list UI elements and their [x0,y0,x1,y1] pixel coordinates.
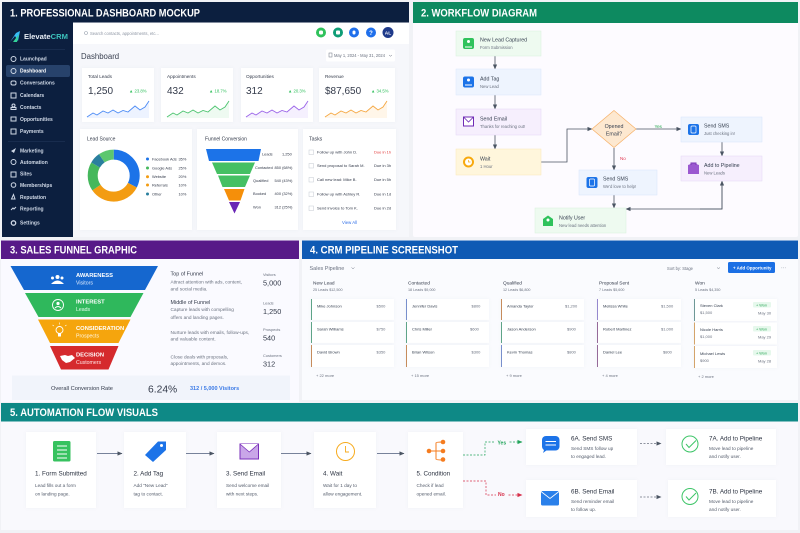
node: add tag: Add Tag [480,76,499,82]
column: proposal sent [597,280,681,378]
KPI card: opportunities: ▲ 20.3% [288,88,306,94]
KPI card: total leads [82,68,154,122]
panel: dashboard mockup [2,2,409,237]
date range: May 1, 2024 - May 31, 2024 [334,53,386,58]
overall conversion rate: Overall Conversion Rate [51,386,113,392]
column: new lead: + 22 more [316,373,335,378]
column: won: 5 Leads $4,350 [695,288,720,292]
tasks card: Send proposal to Sarah M. [317,163,365,168]
KPI card: revenue [319,68,395,122]
column: won: $1,500 [700,310,713,315]
chart card: funnel conversion: 540 (43%) [274,178,293,183]
funnel tier: consideration: Prospects [76,334,99,340]
column: contacted: Contacted [408,280,430,286]
node: send email [456,109,541,135]
column: contacted: + 15 more [411,373,430,378]
chart card: lead source donut: 20% [178,174,187,179]
step: send email: with next steps. [226,492,258,496]
KPI card: appointments [161,68,233,122]
label: no: No [620,156,626,161]
step: wait [314,432,376,508]
tasks card: Follow up with Ashley R. [317,192,360,196]
KPI card: opportunities [241,68,313,122]
chart card: funnel conversion: Qualified [253,178,268,183]
chart card: lead source donut: 10% [178,182,187,188]
funnel tier: interest: Leads [76,307,91,313]
column: contacted: Jennifer Davis [412,304,437,308]
funnel descriptions: Capture leads with compelling [170,307,234,313]
funnel tier: interest: INTEREST [76,300,105,306]
KPI card: total leads: ▲ 23.8% [129,88,147,94]
step: add tag: Add "New Lead" [134,483,168,488]
chart card: funnel conversion: 1,250 [282,152,293,156]
sidebar navigation: Sites [20,172,32,178]
chart card: lead source donut: Lead Source [87,136,116,142]
step: add tag [124,432,186,508]
funnel metrics [263,272,282,368]
step: form submitted: on landing page. [35,492,70,496]
step: 7b add to pipeline: Move lead to pipeline [709,499,754,504]
node: send email: Thanks for reaching out! [480,124,525,129]
chart card: funnel conversion: 850 (68%) [274,165,293,170]
column: contacted: Brian Wilson [412,350,434,354]
node: wait [456,149,541,175]
chart card: funnel conversion: Contacted [255,165,273,170]
column: qualified: + 9 more [506,373,523,378]
column: won: + Won [756,328,767,332]
KPI card: appointments: 432 [167,86,184,97]
heading: workflow: 2. WORKFLOW DIAGRAM [421,8,537,20]
funnel tier: consideration [38,320,130,343]
step: 7a add to pipeline [666,429,776,465]
tasks card: Follow up with John D. [317,150,357,154]
column: contacted: $600 [470,326,480,332]
tasks card: View All [342,220,357,225]
step: 7b add to pipeline [668,480,776,517]
funnel metrics: 5,000 [263,278,281,288]
column: won: Nicole Harris [700,327,723,332]
column: won: + 2 more [698,374,715,379]
top search bar: ? [369,31,373,37]
step: send email [217,432,281,508]
KPI card: appointments: Appointments [167,74,196,79]
chart card: lead source donut: Other [152,192,162,196]
column: won: May 29 [758,334,772,340]
KPI card: total leads: 1,250 [88,86,113,97]
branch: no: No [498,492,505,498]
KPI card: revenue: Revenue [325,74,344,79]
overall conversion rate: 6.24% [148,384,177,396]
step: 6b send email: Send reminder email [571,499,614,504]
heading: automation: 5. AUTOMATION FLOW VISUALS [10,407,158,419]
node: new lead captured: Form Submission [480,45,513,50]
funnel descriptions: Close deals with proposals, [170,354,228,360]
chart card: lead source donut: Referrals [152,182,168,188]
column: proposal sent: Melissa White [603,304,629,308]
flow arrows [97,452,404,454]
sidebar navigation: Reputation [20,195,46,201]
sidebar navigation: Launchpad [20,56,47,62]
heading: funnel [1,240,299,259]
chart card: lead source donut: 25% [178,166,187,170]
overall conversion rate [12,376,290,400]
sidebar navigation: Calendars [20,93,44,99]
column: contacted [406,280,489,378]
column: contacted: $300 [472,350,481,354]
column: won: $1,000 [700,334,713,339]
step: 7a add to pipeline: 7A. Add to Pipeline [709,436,763,442]
pipeline toolbar: Sort by: Stage [667,266,694,271]
node: notify user: Notify User [559,216,585,222]
tasks card [303,129,396,230]
overall conversion rate: 312 / 5,000 Visitors [190,386,239,392]
funnel descriptions [170,272,249,367]
column: qualified: $800 [567,350,577,354]
column: proposal sent: Robert Martinez [603,326,631,332]
step: wait: 4. Wait [323,470,343,478]
column: contacted: Chris Miller [412,326,433,332]
column: won: $900 [700,358,710,363]
step: form submitted: 1. Form Submitted [35,470,87,478]
top search bar [73,23,409,44]
step: 6a send sms: to engaged lead. [571,454,606,459]
node: send sms lower [579,170,657,195]
column: proposal sent: $800 [663,350,673,354]
step: 6a send sms [526,429,637,465]
node: add to pipeline: New Leads [704,170,725,176]
chart card: funnel conversion: 312 (25%) [274,204,293,210]
tasks card: Due in 1h [374,150,391,154]
sidebar navigation: Memberships [20,183,52,189]
branch: yes [463,439,522,455]
column: new lead: $350 [376,350,386,354]
label: yes: Yes [654,124,663,129]
sidebar navigation [2,22,73,237]
column: new lead: 25 Leads $12,500 [313,288,343,292]
step: send email: Send welcome email [226,483,269,488]
step: 6a send sms: Send SMS follow up [571,446,614,451]
tasks card: Due in 2d [374,206,391,210]
decision: opened email [592,110,636,148]
dashed connectors [640,444,661,497]
funnel descriptions: Top of Funnel [170,272,203,278]
column: won: May 28 [758,358,772,364]
connectors [495,56,722,209]
column: won: + Won [756,304,767,308]
funnel tier: decision [50,346,118,370]
heading: dashboard [2,2,409,22]
sidebar navigation: Payments [20,129,44,135]
step: 6b send email [526,480,637,517]
node: wait: Wait [480,156,491,162]
funnel descriptions: appointments, and demos. [170,361,226,367]
step: send email: 3. Send Email [226,470,265,478]
step: 7a add to pipeline: Move lead to pipeline [709,446,754,451]
column: won: Steven Clark [700,303,723,308]
step: 7b add to pipeline: 7B. Add to Pipeline [709,488,763,496]
tasks card: Due in 3h [374,163,391,168]
heading: pipeline [302,240,798,259]
step: 6a send sms: 6A. Send SMS [571,436,612,442]
column: new lead: Sarah Williams [317,326,344,332]
tasks card: Tasks [309,136,323,142]
funnel tier: consideration: CONSIDERATION [76,326,124,332]
funnel metrics: 312 [263,360,275,368]
funnel descriptions: offers and landing pages. [170,315,224,321]
heading: automation [1,403,798,422]
sidebar navigation: Dashboard [20,68,46,74]
panel: workflow diagram [413,2,798,237]
column: proposal sent: $1,500 [661,304,674,308]
step: condition: opened email. [416,492,446,496]
column: qualified: Qualified [503,280,522,286]
funnel metrics: 1,250 [263,307,281,316]
column: new lead: $500 [376,304,386,308]
sidebar navigation: Contacts [20,105,42,111]
column: won: Won [695,280,705,286]
step: 6b send email: 6B. Send Email [571,488,614,496]
funnel metrics: Leads [263,300,274,306]
tasks card: Call new lead: Mike B. [317,177,357,182]
branch: no [463,481,522,498]
column: new lead [311,280,394,378]
date range [326,50,395,62]
step: form submitted: Lead fills out a form [35,483,76,488]
sidebar navigation: Reporting [20,206,44,212]
column: proposal sent: + 4 more [602,373,619,378]
funnel metrics: Customers [263,353,282,358]
step: 6b send email: to follow up. [571,507,596,512]
funnel metrics: 540 [263,334,275,342]
step: condition: Check if lead [416,483,444,488]
panel: crm pipeline [302,240,798,400]
column: qualified: Amanda Taylor [507,304,534,308]
node: notify user [535,208,626,233]
sidebar navigation: Settings [20,220,40,226]
column: won: May 30 [758,310,772,316]
funnel tier: awareness [10,266,158,290]
top search bar: AL [385,30,391,36]
node: send sms lower: We'd love to help! [603,184,636,189]
column: qualified [501,280,584,378]
funnel tier: awareness: AWARENESS [76,273,113,279]
funnel descriptions: Attract attention with ads, content, [170,280,242,286]
chart card: funnel conversion: Funnel Conversion [205,136,247,142]
tasks card: Send invoice to Tom K. [317,206,358,210]
chart card: lead source donut: 10% [178,192,187,196]
funnel tier: awareness: Visitors [76,280,93,286]
heading: workflow [413,2,798,23]
sidebar navigation: Opportunities [20,117,53,123]
chart card: funnel conversion: Won [253,204,261,210]
node: add to pipeline [681,156,762,181]
column: contacted: 18 Leads $9,000 [408,288,435,292]
column: won: + Won [756,352,767,356]
sidebar navigation: Conversations [20,80,55,86]
chart card: lead source donut [80,129,192,230]
funnel metrics: Visitors [263,272,276,277]
node: wait: 1 Hour [480,164,493,169]
step: 7a add to pipeline: and notify user. [709,454,741,459]
KPI card: revenue: $87,650 [325,86,362,97]
funnel descriptions: and valuable content. [170,336,216,342]
column: qualified: Kevin Thomas [507,350,532,354]
node: notify user: New lead needs attention [559,223,607,228]
step: 7b add to pipeline: and notify user. [709,507,741,512]
tasks card: Due in 1d [374,192,391,196]
sidebar navigation: Marketing [20,148,44,154]
dashboard title: Dashboard [81,52,119,61]
KPI card: revenue: ▲ 34.5% [371,88,389,94]
chart card: funnel conversion: Leads [262,152,273,156]
node: new lead captured [456,31,541,56]
column: new lead: New Lead [313,280,335,286]
pipeline toolbar: ··· [781,266,786,272]
pipeline toolbar [310,262,786,273]
funnel descriptions: Middle of Funnel [170,300,210,306]
chart card: funnel conversion: 400 (32%) [274,191,293,196]
column: qualified: 12 Leads $6,800 [503,288,530,292]
column: won: Michael Lewis [700,351,725,356]
node: add tag: New Lead [480,84,500,89]
column: new lead: David Brown [317,350,340,354]
column: qualified: $1,200 [565,304,578,308]
funnel tier: decision: Customers [76,360,101,366]
step: add tag: tag to contact. [134,492,163,496]
column: qualified: Jason Anderson [507,326,536,332]
heading: pipeline: 4. CRM PIPELINE SCREENSHOT [310,244,458,256]
logo [10,31,68,42]
logo: ElevateCRM [24,32,68,41]
tasks card: Due in 5h [374,177,391,182]
node: add tag [456,69,541,95]
step: condition: 5. Condition [416,470,451,478]
node: send sms right: Send SMS [704,124,730,130]
column: proposal sent: Daniel Lee [603,350,623,354]
funnel descriptions: Nurture leads with emails, follow-ups, [170,330,249,336]
KPI card: appointments: ▲ 18.7% [209,88,227,94]
column: proposal sent: 7 Leads $5,600 [599,288,624,292]
chart card: funnel conversion: Booked [253,191,266,196]
step: add tag: 2. Add Tag [134,470,164,478]
column: new lead: $750 [376,326,386,332]
step: wait: allow engagement. [323,492,362,496]
column: new lead: Mike Johnson [317,304,342,308]
column: proposal sent: Proposal Sent [599,280,630,286]
column: qualified: $900 [567,326,577,332]
chart card: lead source donut: Website [152,174,166,179]
funnel tier: decision: DECISION [76,352,104,358]
chart card: funnel conversion [197,129,298,230]
branch: yes: Yes [498,440,506,446]
top search bar: Search contacts, appointments, etc... [90,31,159,36]
decision: opened email: Email? [606,132,622,138]
KPI card: total leads: Total Leads [88,74,113,79]
decision: opened email: Opened [605,124,623,130]
heading: funnel: 3. SALES FUNNEL GRAPHIC [10,244,137,256]
node: send sms lower: Send SMS [603,176,629,182]
chart card: lead source donut: Google Ads [152,166,172,170]
column: proposal sent: $1,000 [661,326,674,332]
pipeline toolbar: Sales Pipeline [310,266,344,272]
node: send sms right: Just checking in! [704,131,735,136]
node: send sms right [681,117,762,142]
funnel tier: interest [25,293,144,317]
sidebar navigation: Automation [20,160,48,166]
chart card: lead source donut: 35% [178,156,187,162]
node: new lead captured: New Lead Captured [480,38,527,44]
heading: dashboard: 1. PROFESSIONAL DASHBOARD MOCKUP [10,8,200,20]
funnel descriptions: and social media. [170,286,207,292]
pipeline toolbar: + Add Opportunity [733,266,772,270]
panel: sales funnel [1,240,299,402]
step: condition [408,432,463,508]
KPI card: opportunities: 312 [246,86,263,97]
node: add to pipeline: Add to Pipeline [704,163,740,169]
node: send email: Send Email [480,116,507,122]
column: contacted: $800 [472,304,481,308]
step: form submitted [26,432,96,508]
step: wait: Wait for 1 day to [323,483,357,488]
chart card: lead source donut: Facebook Ads [152,156,177,162]
panel: automation flow [1,403,798,530]
KPI card: opportunities: Opportunities [246,74,275,79]
column: won [694,280,777,379]
funnel metrics: Prospects [263,327,280,332]
